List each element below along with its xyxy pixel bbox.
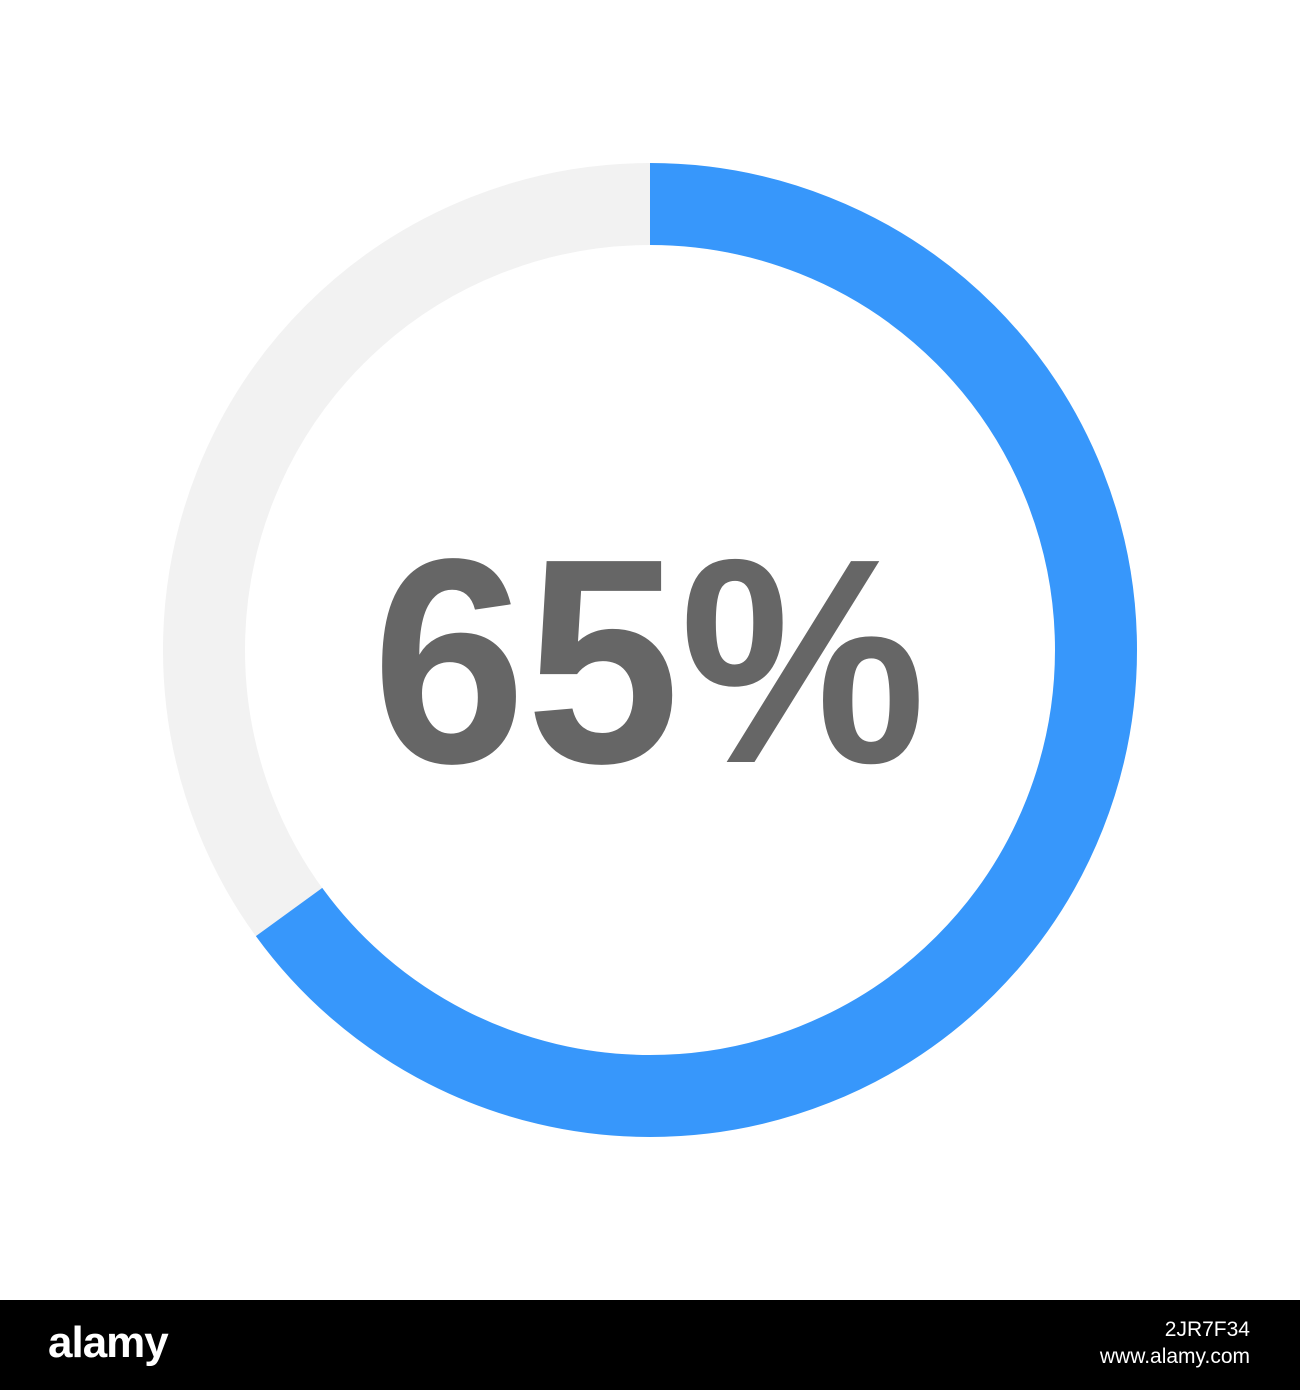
footer image id: www.alamy.com: [1100, 1345, 1250, 1368]
footer logo text: alamy: [48, 1318, 168, 1367]
footer image id: [1100, 1318, 1250, 1368]
footer image id: 2JR7F34: [1165, 1318, 1250, 1341]
footer bar: [0, 1300, 1300, 1390]
percentage label: 65%: [372, 498, 926, 825]
ring track: [204, 204, 1096, 1096]
ring progress 65%: [204, 204, 1096, 1096]
